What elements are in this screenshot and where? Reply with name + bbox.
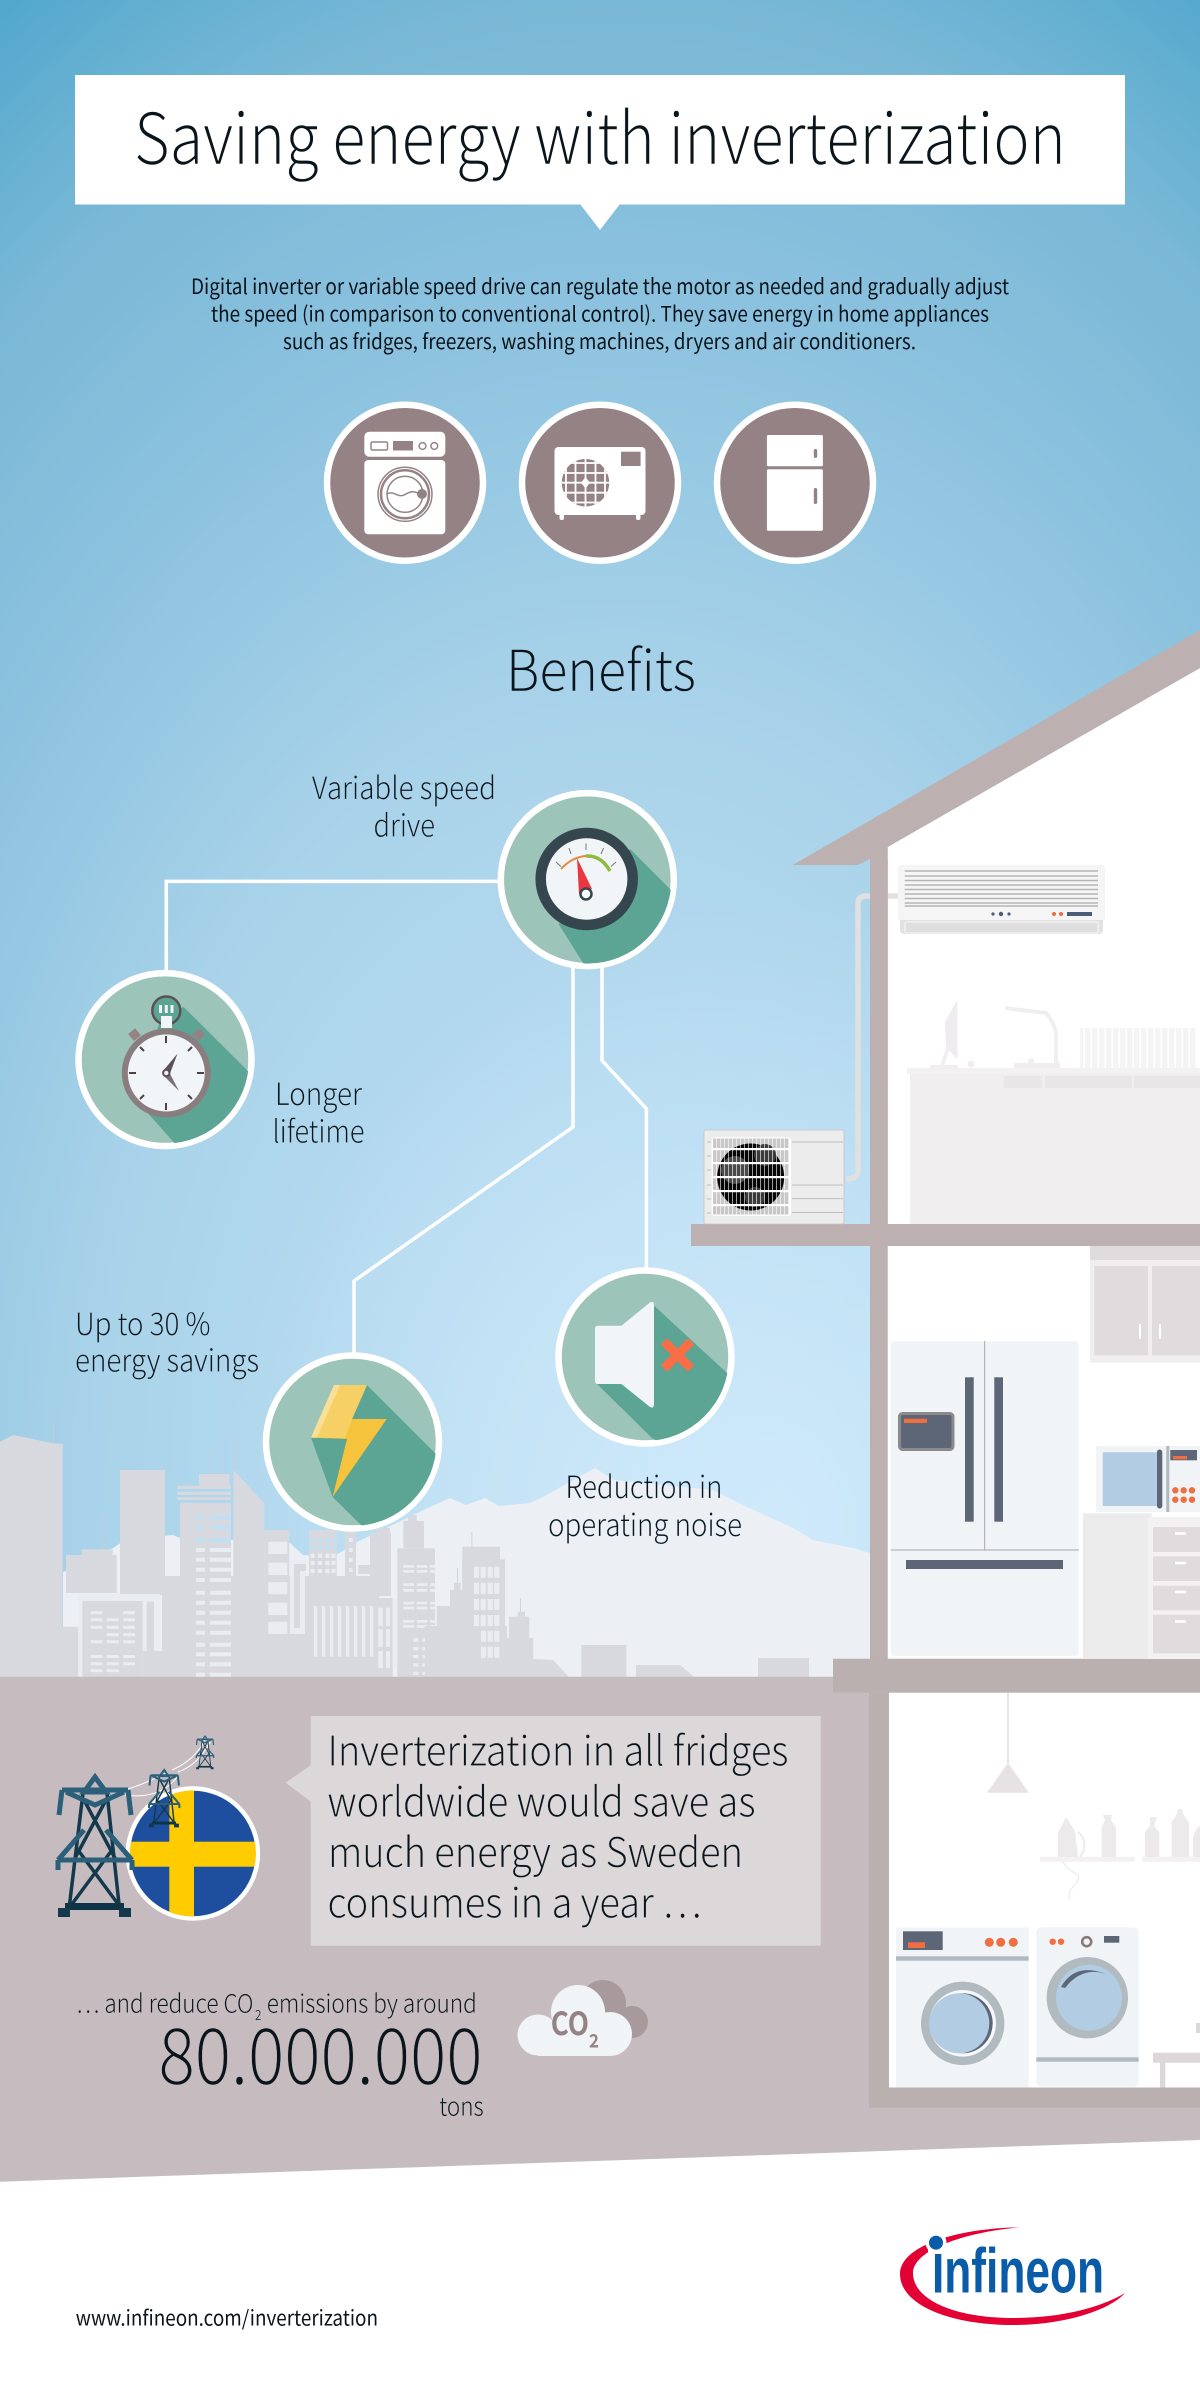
title: Saving energy with inverterization [134,83,1066,185]
outdoor air conditioner unit [704,1130,844,1224]
callout text: much energy as Sweden [328,1819,743,1879]
washing machine [896,1927,1029,2088]
CO2 reduction text [76,1985,484,2124]
intro text: Digital inverter or variable speed drive can regulate the motor as needed and gradually adjust [191,271,1009,301]
kitchen cabinets [1083,1246,1200,1659]
icon: lightning bolt [311,1385,387,1497]
label: reduction in noise: Reduction in [566,1462,722,1507]
icon: CO2 cloud: 2 [589,2027,599,2054]
benefit: longer lifetime [78,973,270,1160]
framed low building [78,1594,160,1680]
refrigerator [891,1341,1079,1656]
callout text [328,1718,788,1930]
benefit: reduction in noise [558,1270,740,1450]
icon: stopwatch [125,996,208,1114]
title banner [75,75,1125,230]
house [691,630,1200,2108]
CO2 reduction text: emissions by around [267,1985,477,2021]
icon: CO2 cloud: CO [551,1999,589,2045]
CO2 reduction text: tons [439,2088,484,2124]
label: variable speed drive: drive [374,801,435,846]
heading: Benefits: Benefits [506,626,696,708]
intro text: such as fridges, freezers, washing machines, dryers and air conditioners. [283,326,916,356]
house interior [888,668,1200,2088]
icon: outdoor air conditioner [522,405,678,561]
icon: washing machine [327,405,483,561]
microwave [1096,1446,1200,1512]
label: longer lifetime: lifetime [272,1106,364,1152]
benefit: energy savings [266,1356,455,1540]
middle blocks [290,1560,306,1634]
icon: fridge [717,405,873,561]
label: longer lifetime [272,1069,364,1152]
big number: 80.000.000 [158,1995,482,2107]
CO2 reduction text: … and reduce CO [76,1985,253,2021]
lamp [987,1693,1029,1793]
callout text: Inverterization in all fridges [328,1718,788,1778]
label: variable speed drive [312,763,496,846]
mountains [63,1468,870,1680]
laundry shelf [1040,1809,1200,1900]
Infineon logo: Infineon [932,2237,1104,2307]
label: reduction in noise [548,1462,742,1545]
icon: muted speaker [595,1302,691,1408]
furniture: upper room desk [907,1000,1200,1224]
walls and floors [691,630,1200,2108]
label: variable speed drive: Variable speed [312,763,496,808]
label: reduction in noise: operating noise [548,1500,742,1545]
benefit: variable speed drive [498,790,677,970]
icon: power pylons [58,1736,214,1917]
CO2 reduction text: 2 [255,2005,261,2025]
callout: Sweden comparison [286,1716,821,1946]
ground band [0,1677,1200,2182]
small table [1153,2023,1200,2088]
Infineon logo [900,2227,1125,2325]
label: energy savings: energy savings [75,1336,259,1381]
callout text: consumes in a year … [328,1870,702,1930]
city skyline [0,1422,809,1681]
intro text [191,271,1009,356]
footer [0,2140,1200,2400]
air conditioner indoor unit [898,865,1105,934]
intro text: the speed (in comparison to conventional control). They save energy in home appliances [211,298,989,328]
label: longer lifetime: Longer [275,1069,363,1114]
label: energy savings [75,1299,259,1381]
icon: CO2 cloud [518,1980,648,2056]
icon: gauge [541,833,633,925]
tall building windows [196,1515,231,1542]
callout text: worldwide would save as [328,1768,756,1828]
icon: Swedish flag [126,1786,260,1921]
connector lines [166,881,646,1355]
dryer [1036,1927,1139,2087]
footer URL: www.infineon.com/inverterization [76,2303,378,2333]
label: energy savings: Up to 30 % [75,1299,210,1344]
refrigerant pipe [846,896,898,1179]
